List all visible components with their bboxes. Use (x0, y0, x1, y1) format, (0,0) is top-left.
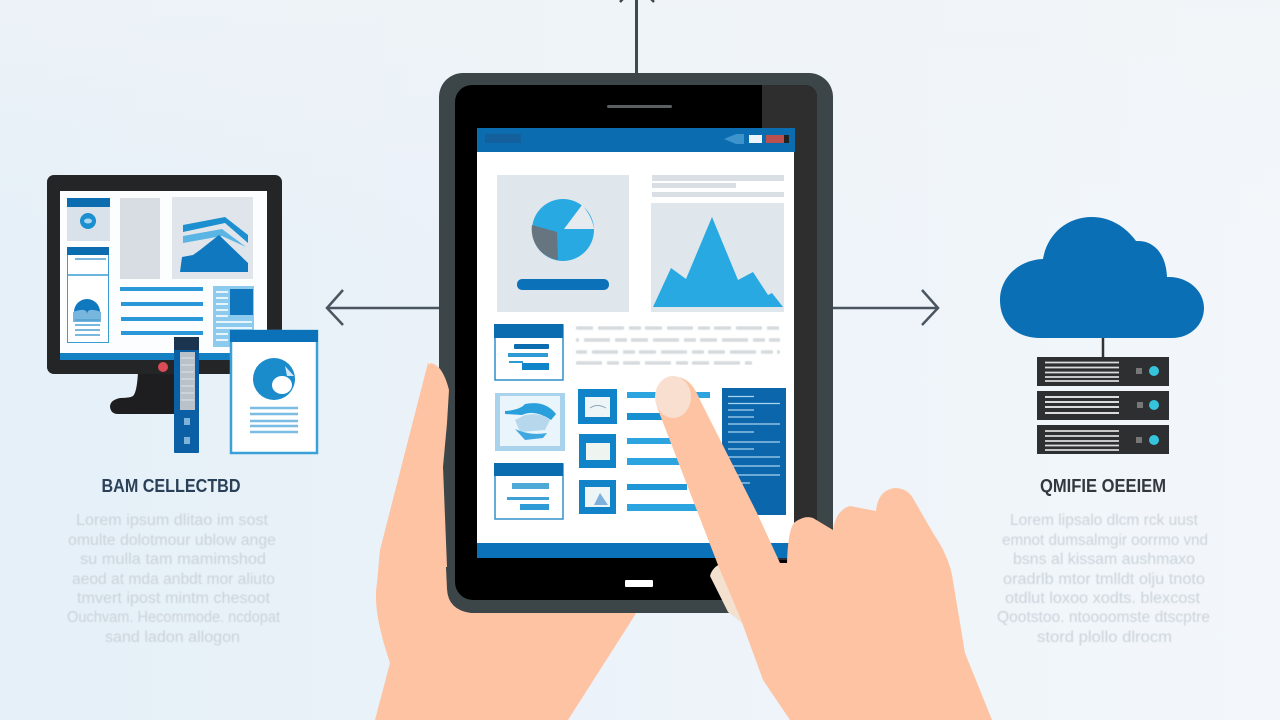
icon: desktop monitor (47, 175, 282, 414)
gray header lines (652, 175, 784, 197)
icon: server stack (1037, 338, 1169, 454)
text block: left: Ouchvam. Hecommode. ncdopat (67, 609, 281, 626)
text block: right (997, 512, 1210, 646)
home button (625, 580, 653, 587)
icon: document tablet (230, 330, 318, 453)
text block: right: emnot dumsalmgir oorrmo vnd (1002, 532, 1208, 549)
illustration: tablet (439, 73, 833, 613)
text block: right: otdlut loxoo xodts. blexcost (1005, 590, 1201, 607)
text block: left: omulte dolotmour ublow ange (68, 532, 276, 549)
text block: right: Qootstoo. ntoooomste dtscptre (997, 609, 1210, 626)
server unit 2 (1037, 391, 1169, 420)
text block: right: stord plollo dlrocm (1037, 629, 1172, 646)
monitor side table (213, 286, 254, 347)
heading: left: BAM CELLECTBD (102, 476, 240, 496)
thumbnail squares (578, 389, 617, 514)
screen header bar (477, 128, 795, 152)
text block: left (67, 512, 281, 646)
bottom bar (477, 543, 794, 558)
server unit 1 (1037, 357, 1169, 386)
arrow: up from tablet (620, 0, 654, 74)
fingernail (655, 376, 691, 418)
heading: right: QMIFIE OEEIEM (1040, 476, 1166, 496)
monitor landscape chart (172, 197, 253, 279)
icon: tall phone device (174, 337, 199, 453)
monitor text lines (120, 289, 203, 333)
text block: left: aeod at mda anbdt mor aliuto (72, 571, 275, 588)
tablet frame (439, 73, 833, 613)
top small card (494, 324, 563, 380)
text block: right: Lorem lipsalo dlcm rck uust (1010, 512, 1199, 529)
image card (495, 393, 565, 451)
monitor card with cloud (67, 247, 109, 342)
bottom small card (494, 463, 563, 519)
illustration: right hand with pointing finger (655, 376, 992, 720)
text block: left: su mulla tam mamimshod (80, 551, 266, 568)
text block: right: bsns al kissam aushmaxo (1013, 551, 1195, 568)
blue list bars (627, 392, 710, 511)
text block: left: sand ladon allogon (105, 629, 240, 646)
blue table panel (722, 388, 786, 515)
tablet bezel (455, 85, 817, 600)
mountain chart panel (651, 203, 784, 312)
tablet screen (477, 128, 795, 558)
illustration: left hand fingers over tablet edge (428, 363, 449, 567)
text block: right: oradrlb mtor tmlldt olju tnoto (1003, 571, 1205, 588)
illustration: left hand palm (375, 363, 640, 720)
server unit 3 (1037, 425, 1169, 454)
gray text lines (576, 328, 780, 363)
text block: left: Lorem ipsum dlitao im sost (76, 512, 269, 529)
arrow: right to cloud (832, 290, 938, 325)
pie chart panel (497, 175, 629, 312)
text block: left: tmvert ipost mintm chesoot (77, 590, 271, 607)
speaker (607, 105, 672, 108)
monitor card with circle (67, 198, 110, 241)
icon: cloud (1000, 217, 1204, 338)
arrow: left to monitor (327, 290, 440, 325)
monitor gray column (120, 198, 160, 279)
